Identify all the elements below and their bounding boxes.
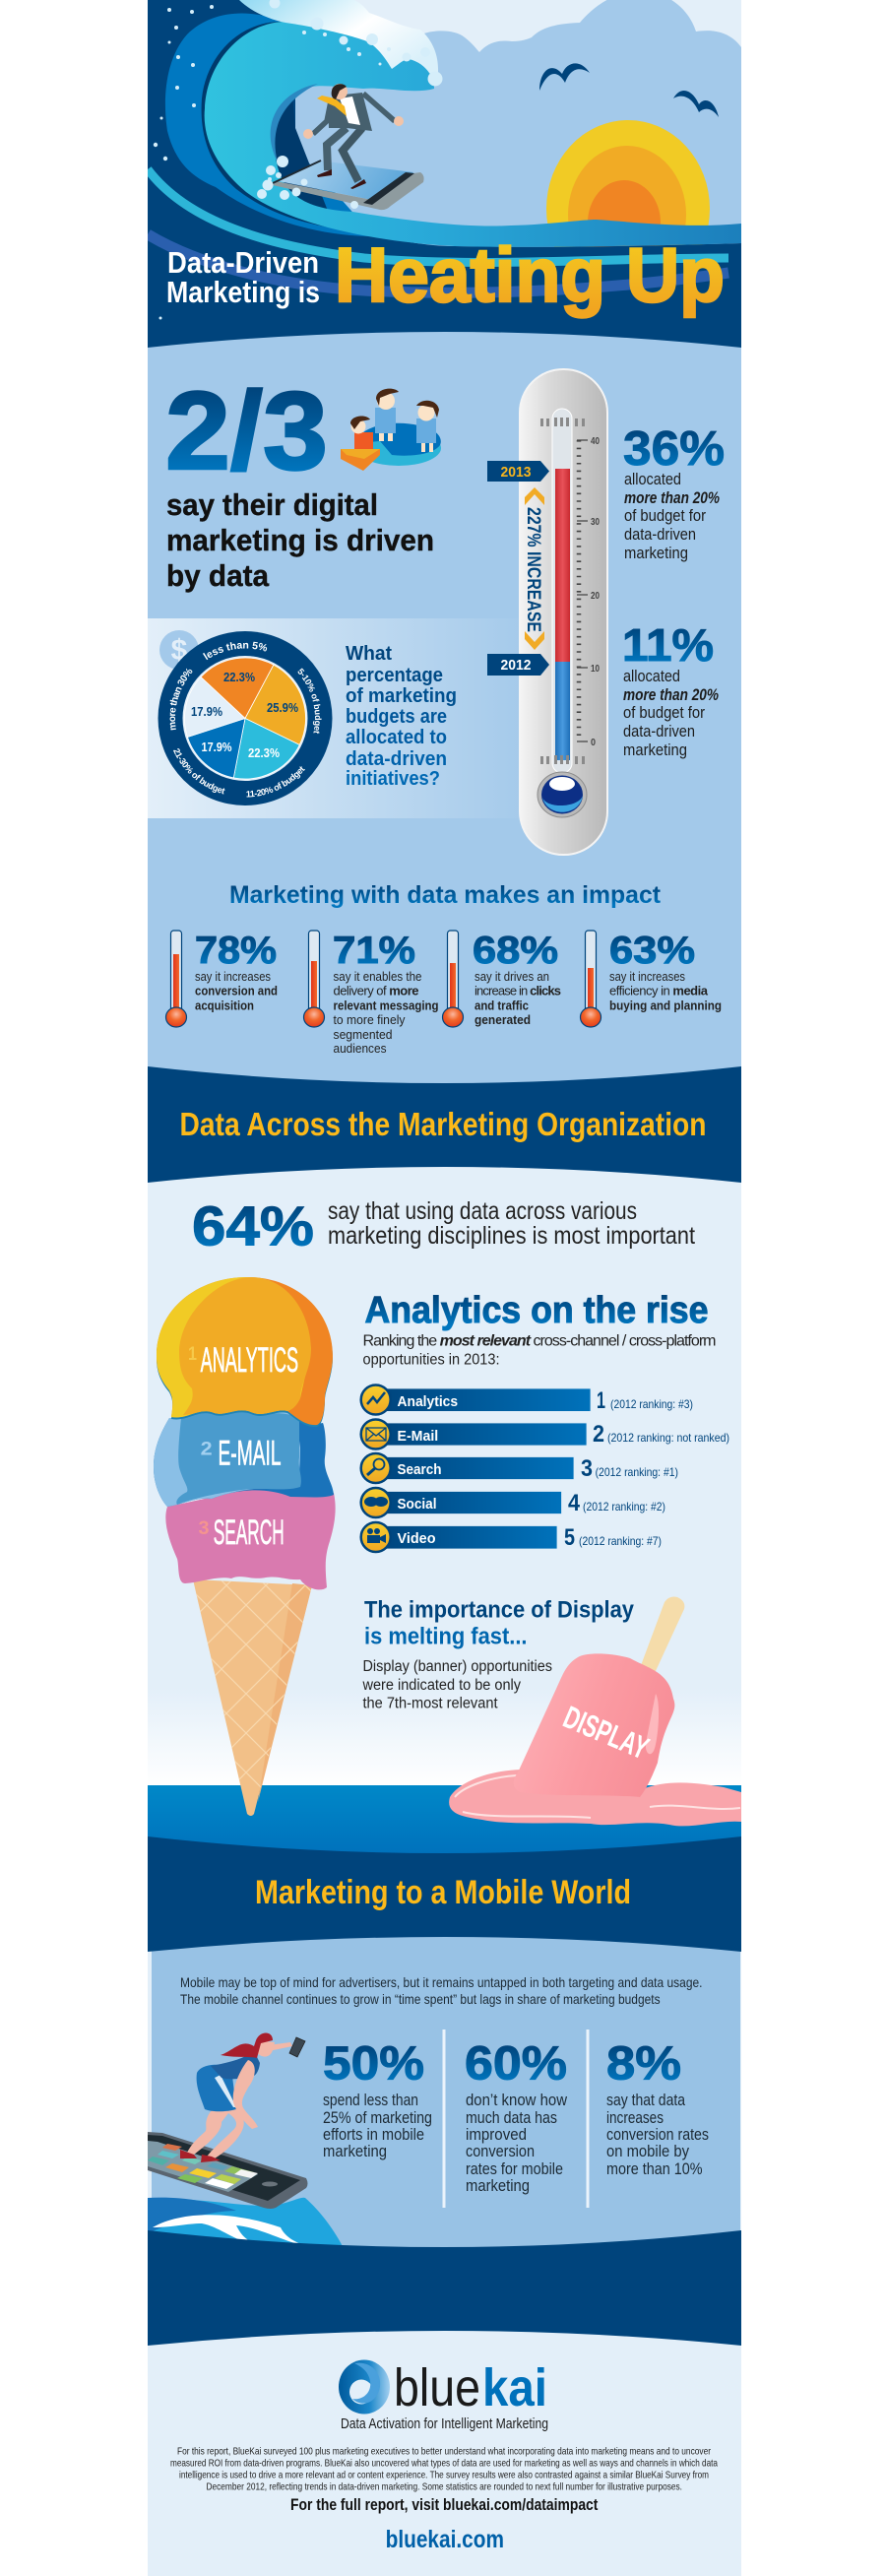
heading: analytics on the rise: Analytics on the rise bbox=[364, 1290, 709, 1331]
flag: 2013: 2013 bbox=[500, 464, 532, 481]
icon: ice cream cone bbox=[154, 1277, 336, 1816]
small thermometer bbox=[303, 931, 325, 1027]
icon: dollar coin: $ bbox=[171, 634, 188, 667]
heading: display melting: is melting fast... bbox=[364, 1623, 528, 1650]
pie chart: 25.9% bbox=[267, 700, 298, 715]
intro text: mobile: Mobile may be top of mind for advertisers, but it remains untapped in both targeting and data usage. bbox=[180, 1974, 703, 1990]
thermometer scale: 30 bbox=[591, 517, 600, 528]
big stat: 2/3: 2/3 bbox=[165, 369, 328, 492]
stat column: 63%: buying and planning bbox=[609, 998, 722, 1012]
flag: 2012: 2012 bbox=[500, 657, 532, 674]
ranking bars bbox=[361, 1385, 729, 1552]
large thermometer bbox=[520, 369, 607, 855]
stat column: 68%: and traffic bbox=[475, 998, 529, 1012]
small thermometer bbox=[443, 931, 463, 1027]
stat column: 71%: say it enables the bbox=[333, 969, 421, 984]
pie chart: more than 30% bbox=[169, 668, 193, 731]
big stat: 2/3 bbox=[165, 369, 434, 593]
stat: 36%: allocated bbox=[624, 470, 681, 488]
illustration: woman surfing on smartphone bbox=[148, 2032, 345, 2250]
pie chart bbox=[158, 631, 333, 805]
stat: 11%: of budget for bbox=[623, 703, 705, 722]
question text: of marketing bbox=[346, 685, 457, 707]
stat: 8%: conversion rates bbox=[606, 2125, 709, 2144]
logo: bluekai: blue bbox=[394, 2358, 480, 2417]
bar: video: Video bbox=[398, 1531, 436, 1547]
title: Heating Up bbox=[335, 231, 725, 318]
icon: swirl bbox=[339, 2359, 390, 2415]
bar: analytics bbox=[361, 1385, 693, 1414]
text block: methodology bbox=[170, 2446, 718, 2493]
scoop: analytics bbox=[157, 1277, 333, 1427]
stat: 60%: conversion bbox=[466, 2142, 535, 2160]
heading: display melting bbox=[362, 1597, 635, 1712]
bar: video: 5 bbox=[564, 1524, 575, 1551]
website link: bluekai.com bbox=[386, 2526, 504, 2553]
stat column: 78% bbox=[165, 930, 278, 1027]
icon: birds bbox=[539, 63, 719, 117]
scoop: e-mail: E-MAIL bbox=[219, 1434, 282, 1473]
stat: 60%: rates for mobile bbox=[466, 2159, 563, 2178]
bar: analytics: (2012 ranking: #3) bbox=[610, 1397, 693, 1411]
text block: methodology: December 2012, reflecting trends in data-driven marketing. Some statistics are rounded to next full number for illustrative purposes. bbox=[207, 2481, 682, 2493]
stat column: 78%: conversion and bbox=[195, 984, 278, 998]
stat: 36% bbox=[623, 422, 725, 562]
stat: 8% bbox=[606, 2038, 709, 2178]
heading: analytics on the rise: opportunities in 2013: bbox=[362, 1352, 500, 1369]
cone bbox=[193, 1579, 311, 1816]
sky and cloud bbox=[354, 0, 741, 52]
question text: percentage bbox=[346, 665, 443, 686]
scoop: search bbox=[165, 1489, 336, 1589]
icon: surfing businessman bbox=[303, 84, 404, 189]
woman bbox=[180, 2032, 305, 2162]
big stat: 2/3: by data bbox=[166, 558, 270, 593]
pie chart: 22.3% bbox=[223, 670, 255, 684]
stat: 8%: 8% bbox=[606, 2038, 681, 2091]
foam bubbles bbox=[154, 0, 443, 319]
heading: analytics on the rise: Ranking the most relevant cross-channel / cross-platform bbox=[362, 1333, 717, 1350]
stat column: 71% bbox=[303, 930, 439, 1056]
icon: dollar coin bbox=[159, 630, 199, 670]
scoop: e-mail: 2 bbox=[201, 1440, 213, 1459]
bar: e-mail: E-Mail bbox=[398, 1429, 438, 1445]
navy lower field and left of wave bbox=[148, 0, 741, 348]
stat: 60%: marketing bbox=[466, 2176, 530, 2195]
bubbles around board bbox=[257, 156, 358, 209]
stat column: 71%: segmented bbox=[333, 1027, 392, 1042]
bar: search: Search bbox=[398, 1462, 441, 1478]
bar: analytics: Analytics bbox=[398, 1394, 458, 1410]
title bbox=[166, 231, 725, 318]
heading: display melting: The importance of Display bbox=[364, 1597, 635, 1623]
text block: methodology: measured ROI from data-driven programs. BlueKai also uncovered what types of data are used for marketing as well as ways and channels in which data bbox=[170, 2458, 718, 2470]
small thermometer bbox=[165, 931, 187, 1027]
stat column: 71%: delivery of more bbox=[333, 984, 419, 998]
bar: e-mail: 2 bbox=[593, 1421, 604, 1448]
stat: 36%: marketing bbox=[624, 544, 688, 562]
icon: melting popsicle bbox=[449, 1597, 741, 1826]
question text bbox=[346, 643, 457, 790]
bar: search: (2012 ranking: #1) bbox=[596, 1465, 678, 1479]
stat: 64%: marketing disciplines is most important bbox=[328, 1222, 695, 1250]
question text: data-driven bbox=[346, 748, 447, 770]
stat: 11% bbox=[622, 619, 719, 759]
stat: 64% bbox=[192, 1195, 695, 1258]
bar: e-mail bbox=[361, 1420, 729, 1449]
title: Marketing is bbox=[166, 275, 320, 309]
stat: 8%: more than 10% bbox=[606, 2159, 703, 2178]
text block: methodology: For this report, BlueKai surveyed 100 plus marketing executives to better understand what incorporating data into marketing means and to uncover bbox=[177, 2446, 711, 2458]
question text: allocated to bbox=[346, 727, 447, 748]
question text: What bbox=[346, 643, 392, 665]
stat: 50%: 25% of marketing bbox=[323, 2108, 432, 2127]
flag: 2013 bbox=[487, 461, 549, 482]
pie chart: 17.9% bbox=[201, 740, 232, 754]
big stat: 2/3: marketing is driven bbox=[166, 523, 434, 557]
thermometer clamps bbox=[540, 418, 585, 764]
pie chart: 22.3% bbox=[248, 745, 280, 760]
pie chart: 11-20% of budget bbox=[246, 766, 305, 798]
call to action: full report: For the full report, visit bluekai.com/dataimpact bbox=[290, 2496, 599, 2514]
text block: methodology: intelligence is used to drive a more relevant ad or content experience. The survey results were also contrasted against a similar BlueKai Survey from bbox=[179, 2470, 709, 2481]
bar: search bbox=[361, 1453, 678, 1483]
stat: 60%: don’t know how bbox=[466, 2091, 568, 2109]
stat column: 63%: efficiency in media bbox=[609, 984, 709, 998]
panel: budget allocation bbox=[148, 618, 483, 818]
stat: 11%: data-driven bbox=[623, 722, 695, 741]
pie chart: 5-10% of budget bbox=[297, 668, 322, 735]
flag: 2012 bbox=[487, 654, 549, 676]
intro text: mobile: The mobile channel continues to grow in “time spent” but lags in share of marketing budgets bbox=[180, 1991, 661, 2007]
stat column: 71%: to more finely bbox=[333, 1012, 406, 1027]
panel: page background sections bbox=[148, 0, 741, 2576]
stat column: 71%: relevant messaging bbox=[333, 998, 439, 1012]
stat: 11%: 11% bbox=[622, 619, 714, 671]
stat: 8%: increases bbox=[606, 2108, 664, 2127]
intro text: mobile bbox=[180, 1974, 703, 2007]
bar: e-mail: (2012 ranking: not ranked) bbox=[607, 1431, 729, 1445]
thermometer scale bbox=[577, 436, 600, 748]
logo: bluekai: Data Activation for Intelligent Marketing bbox=[341, 2415, 548, 2432]
stat: 60%: 60% bbox=[465, 2038, 567, 2091]
stat: 50%: 50% bbox=[323, 2038, 424, 2091]
stat: 36%: of budget for bbox=[624, 506, 706, 525]
heading: impact: Marketing with data makes an impact bbox=[229, 881, 662, 909]
big stat: 2/3: say their digital bbox=[166, 487, 378, 522]
small thermometer bbox=[581, 931, 601, 1027]
stat: 64%: say that using data across various bbox=[328, 1197, 637, 1225]
heading: display melting: Display (banner) opportunities bbox=[362, 1658, 552, 1675]
icon: melting popsicle: DISPLAY bbox=[558, 1699, 654, 1767]
scoop: e-mail bbox=[154, 1410, 334, 1507]
heading: display melting: were indicated to be only bbox=[362, 1677, 521, 1694]
divider bbox=[587, 2029, 589, 2208]
section band: marketing to a mobile world bbox=[148, 1836, 741, 1952]
thermometer scale: 0 bbox=[591, 738, 596, 748]
stat: 60% bbox=[465, 2038, 568, 2195]
thermometer scale: 10 bbox=[591, 664, 600, 675]
icon: people on pie chart bbox=[341, 389, 441, 471]
stat: 11%: marketing bbox=[623, 741, 687, 759]
section band: marketing to a mobile world: Marketing to a Mobile World bbox=[255, 1874, 631, 1911]
stat: 36%: data-driven bbox=[624, 525, 696, 544]
question text: budgets are bbox=[346, 706, 447, 728]
stat: 36%: 36% bbox=[623, 422, 725, 476]
heading: analytics on the rise bbox=[362, 1290, 717, 1369]
stat column: 71%: 71% bbox=[333, 930, 415, 972]
stat column: 63%: say it increases bbox=[609, 969, 685, 984]
stat column: 68%: 68% bbox=[473, 930, 558, 972]
icon: sun bbox=[546, 120, 710, 247]
stat column: 68%: increase in clicks bbox=[475, 984, 561, 998]
stat: 50% bbox=[323, 2038, 432, 2160]
stat: 8%: on mobile by bbox=[606, 2142, 689, 2160]
icon: wave bbox=[165, 0, 741, 247]
section band: empty navy footer band bbox=[148, 2230, 741, 2346]
bar: analytics: 1 bbox=[597, 1387, 605, 1414]
phone bbox=[148, 2132, 307, 2209]
question text: initiatives? bbox=[346, 768, 440, 790]
icon: smartphone surfboard bbox=[273, 161, 424, 210]
scoop: analytics: ANALYTICS bbox=[201, 1341, 298, 1380]
thermometer scale: 40 bbox=[591, 436, 600, 447]
pie chart: less than 5% bbox=[203, 642, 268, 660]
pie chart: 17.9% bbox=[191, 704, 222, 719]
bar: social: Social bbox=[398, 1497, 437, 1513]
stat column: 68%: generated bbox=[475, 1012, 531, 1027]
bar: social: (2012 ranking: #2) bbox=[583, 1500, 665, 1513]
stat column: 63% bbox=[581, 930, 722, 1027]
divider bbox=[443, 2029, 445, 2208]
stat: 8%: say that data bbox=[606, 2091, 685, 2109]
scoop: search: SEARCH bbox=[214, 1513, 285, 1552]
bar: social: 4 bbox=[568, 1490, 581, 1516]
heading: display melting: the 7th-most relevant bbox=[362, 1696, 498, 1712]
stat: 11%: allocated bbox=[623, 667, 680, 685]
stat column: 78%: acquisition bbox=[195, 998, 254, 1012]
scoop: search: 3 bbox=[199, 1518, 209, 1539]
stat column: 68%: say it drives an bbox=[475, 969, 549, 984]
stat: 11%: more than 20% bbox=[623, 685, 719, 704]
pie chart: 21-30% of budget bbox=[173, 748, 225, 794]
stat: 64%: 64% bbox=[192, 1195, 314, 1258]
thermometer scale: 20 bbox=[591, 591, 600, 602]
callout: 227% increase: 227% INCREASE bbox=[523, 507, 543, 632]
stat column: 78%: 78% bbox=[195, 930, 277, 972]
bar: video: (2012 ranking: #7) bbox=[579, 1534, 662, 1548]
section band: data across the marketing organization bbox=[148, 1066, 741, 1183]
bar: search: 3 bbox=[581, 1455, 593, 1482]
stat column: 63%: 63% bbox=[609, 930, 695, 972]
logo: bluekai bbox=[339, 2358, 548, 2432]
stat: 60%: much data has bbox=[466, 2108, 557, 2127]
scoop: analytics: 1 bbox=[188, 1344, 197, 1365]
wave bbox=[148, 2198, 343, 2245]
stat column: 71%: audiences bbox=[333, 1041, 387, 1056]
panel: hero illustration bbox=[148, 0, 741, 348]
title: Data-Driven bbox=[167, 245, 319, 280]
stat: 50%: marketing bbox=[323, 2142, 387, 2160]
logo: bluekai: kai bbox=[482, 2358, 547, 2417]
bar: social bbox=[361, 1488, 665, 1517]
stat column: 78%: say it increases bbox=[195, 969, 271, 984]
section band: data across the marketing organization: Data Across the Marketing Organization bbox=[179, 1106, 707, 1142]
stat: 50%: efforts in mobile bbox=[323, 2125, 424, 2144]
stat: 36%: more than 20% bbox=[624, 488, 720, 507]
stat column: 68% bbox=[443, 930, 561, 1027]
stat: 60%: improved bbox=[466, 2125, 527, 2144]
stat: 50%: spend less than bbox=[323, 2091, 418, 2109]
bar: video bbox=[361, 1522, 662, 1552]
